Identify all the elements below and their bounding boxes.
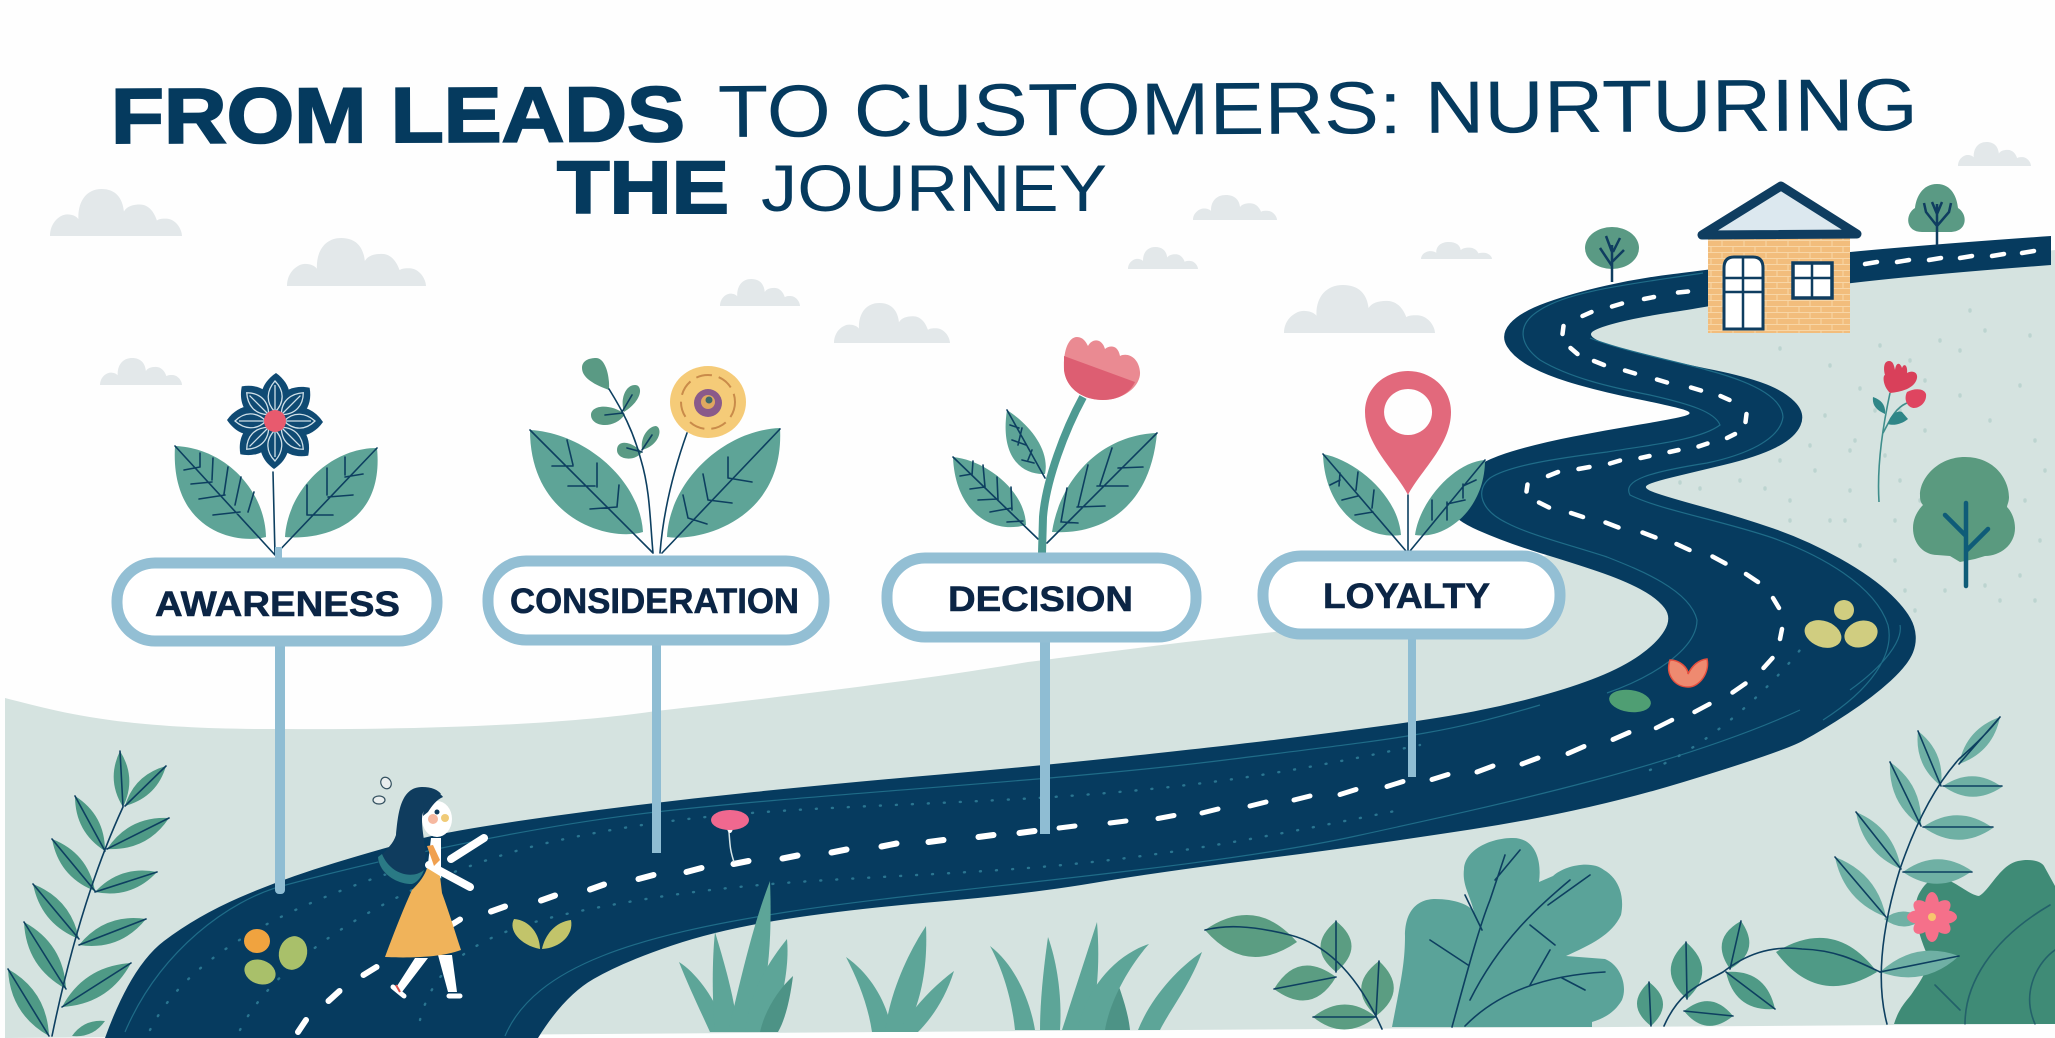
girl face bbox=[422, 801, 452, 837]
girl eye bbox=[434, 810, 440, 814]
house window bbox=[1793, 263, 1832, 298]
sign: loyalty bbox=[1263, 556, 1560, 634]
sign: awareness: AWARENESS bbox=[155, 585, 400, 624]
road lane lines bbox=[125, 273, 1900, 1036]
location pin bbox=[1365, 371, 1451, 495]
road ornaments: mushroom bbox=[711, 810, 749, 862]
tulip stem bbox=[1042, 397, 1083, 553]
title: FROM LEADS bbox=[111, 70, 685, 160]
sign: consideration: CONSIDERATION bbox=[510, 582, 799, 621]
plant: right fern bbox=[1835, 717, 2002, 977]
road ornaments: red fruit slice bbox=[1669, 659, 1708, 687]
title bbox=[111, 63, 1918, 229]
plant: left fern bbox=[8, 751, 169, 1036]
tulip bbox=[1064, 337, 1140, 400]
girl shoe strap bbox=[396, 985, 400, 992]
girl torso bbox=[427, 838, 441, 878]
road centre dashes, near bbox=[298, 831, 1034, 1032]
stage 2: consideration plant bbox=[530, 358, 780, 553]
consideration small leaves bbox=[582, 358, 659, 459]
plant: big centre bush bbox=[1392, 838, 1624, 1027]
girl hair bbox=[378, 787, 441, 883]
sign: awareness bbox=[117, 563, 437, 641]
girl shoes bbox=[393, 987, 460, 996]
plant: second branch with leaves bbox=[1637, 921, 1880, 1026]
road ornaments: orange bud and green leaves bbox=[241, 929, 311, 989]
girl legs bbox=[397, 955, 457, 992]
loyalty leaves bbox=[1323, 454, 1485, 536]
ground hills bbox=[5, 250, 2055, 1038]
road centre dashes, middle bbox=[1059, 732, 1629, 828]
girl nose spot bbox=[441, 814, 449, 822]
background clouds bbox=[50, 142, 2031, 385]
window bars bbox=[1793, 263, 1832, 298]
flower head bbox=[1884, 361, 1917, 393]
awareness sign stub bbox=[275, 547, 282, 561]
girl arms bbox=[429, 838, 484, 887]
girl dress bbox=[385, 868, 461, 957]
road ornaments: green leaf bbox=[1608, 687, 1652, 715]
flower stems bbox=[1879, 393, 1907, 502]
consideration stems and veins bbox=[530, 389, 780, 553]
sign: consideration bbox=[488, 561, 824, 640]
sign: decision bbox=[887, 558, 1196, 637]
sign: decision: DECISION bbox=[948, 580, 1133, 619]
decision leaves bbox=[953, 410, 1157, 532]
centre bush veins bbox=[1430, 850, 1605, 1027]
awareness leaves bbox=[175, 446, 378, 539]
plant: branch with leaves bbox=[1205, 915, 1394, 1030]
sign pole: consideration bbox=[652, 640, 661, 853]
title: THE bbox=[557, 146, 729, 229]
awareness stems and veins bbox=[175, 446, 377, 555]
grass clump 1 bbox=[679, 881, 793, 1032]
girl fringe bbox=[423, 793, 443, 816]
second flower head bbox=[1906, 389, 1926, 408]
decision veins bbox=[953, 410, 1157, 543]
house door bbox=[1724, 257, 1763, 329]
girl dress strap bbox=[427, 845, 440, 866]
sign pole: decision bbox=[1040, 636, 1050, 834]
sign: loyalty: LOYALTY bbox=[1323, 577, 1490, 616]
tulip shade bbox=[1064, 356, 1135, 400]
stage 1: awareness plant bbox=[175, 373, 378, 561]
grass clump 3 bbox=[990, 922, 1202, 1030]
plant: bush, lower right bbox=[1894, 860, 2055, 1024]
loyalty stem and veins bbox=[1323, 454, 1485, 551]
right fern stem and veins bbox=[1835, 717, 2002, 1024]
consideration leaves bbox=[530, 428, 780, 538]
yellow flower bbox=[670, 366, 746, 438]
road speckles bbox=[150, 650, 1800, 1030]
house wall bbox=[1708, 236, 1850, 333]
stage 4: loyalty plant bbox=[1323, 371, 1485, 551]
girl cheek bbox=[428, 814, 438, 824]
hair tips bbox=[378, 854, 424, 884]
red flower on hill bbox=[1873, 361, 1926, 502]
sign pole: awareness bbox=[275, 640, 285, 894]
title: JOURNEY bbox=[761, 151, 1107, 225]
house bbox=[1702, 186, 1857, 333]
door frames bbox=[1724, 258, 1763, 329]
character: girl walking bbox=[373, 775, 484, 996]
grass clump 2 bbox=[846, 926, 954, 1032]
road centre dashes, far bbox=[1526, 251, 2034, 728]
sign pole: loyalty bbox=[1408, 634, 1416, 777]
tree by road, left of house bbox=[1585, 227, 1639, 282]
road ornaments: yellow leaves bbox=[1801, 600, 1881, 653]
stage 3: decision plant bbox=[953, 337, 1157, 553]
hill dots bbox=[1680, 310, 2045, 611]
thought marks bbox=[373, 775, 393, 804]
awareness flower bbox=[227, 373, 323, 469]
tree right of house bbox=[1908, 184, 1965, 246]
road ornaments: olive leaves bbox=[512, 919, 571, 949]
pink flower on bush bbox=[1907, 892, 1957, 942]
flower leaves bbox=[1873, 397, 1908, 425]
road bbox=[105, 236, 2051, 1038]
bush veins bbox=[1935, 905, 2055, 1024]
house roof bbox=[1702, 186, 1857, 235]
title: TO CUSTOMERS: NURTURING bbox=[718, 63, 1918, 153]
large tree on hill bbox=[1913, 457, 2015, 586]
